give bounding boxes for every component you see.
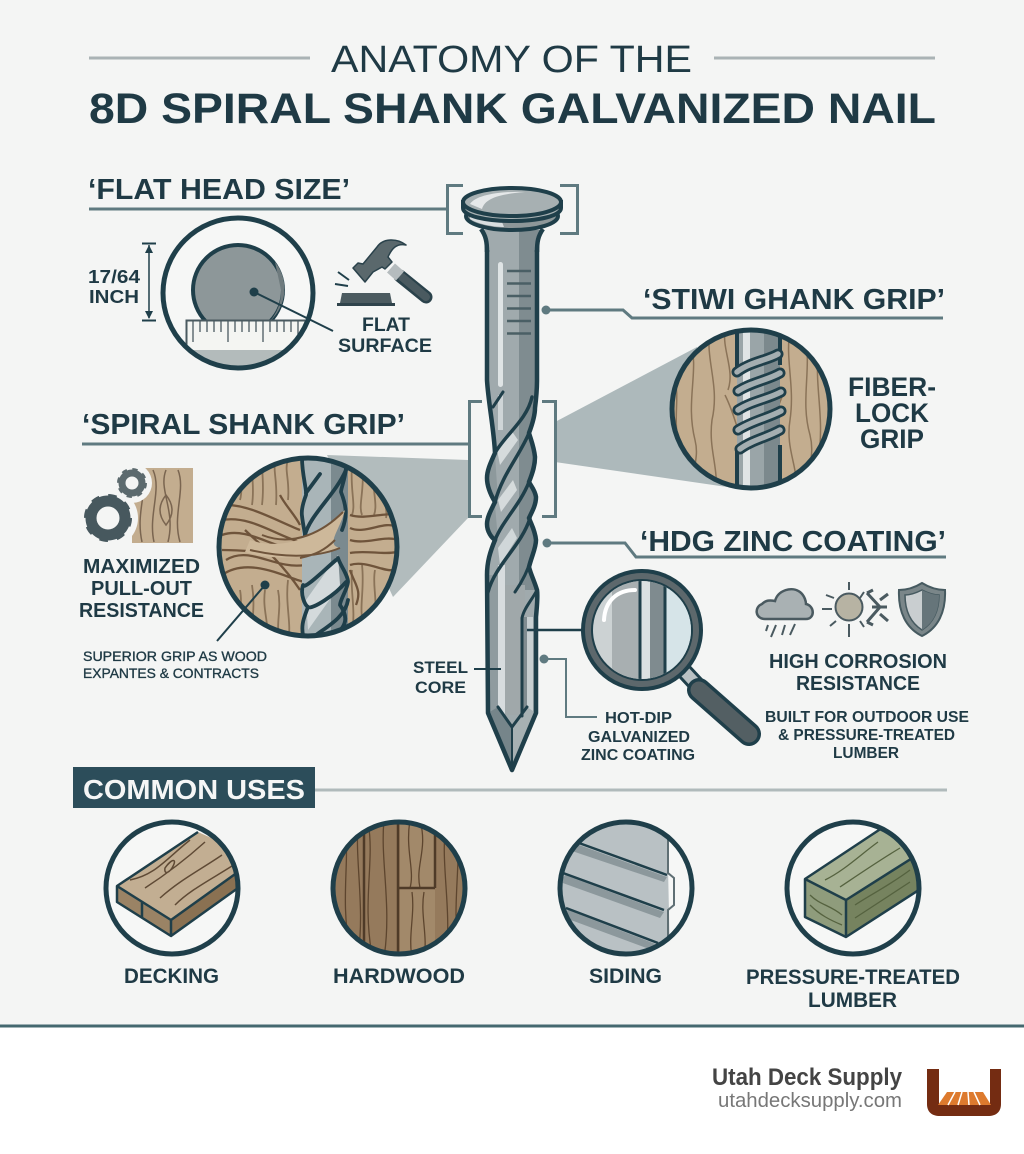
label: hardwood: HARDWOOD: [333, 965, 465, 988]
label: maximized pull-out resistance: RESISTANCE: [79, 600, 204, 622]
label: hot-dip galvanized: GALVANIZED: [588, 729, 690, 746]
heading: hdg zinc coating: ‘HDG ZINC COATING’: [640, 526, 946, 558]
label: fiber-lock grip: [848, 372, 936, 454]
title: ANATOMY OF THE: [331, 39, 692, 81]
spiral bracket: [470, 402, 556, 516]
label: maximized pull-out resistance: PULL-OUT: [91, 578, 192, 600]
panel: spiral shank grip: [78, 409, 469, 681]
dimension label: 17/64: [88, 267, 140, 287]
dimension label: [88, 267, 140, 307]
label: maximized pull-out resistance: [79, 556, 204, 622]
cone: left magnifier projection: [327, 455, 468, 597]
label: steel core: [413, 658, 501, 697]
leader line to shank: [542, 306, 943, 318]
note: outdoor use: BUILT FOR OUTDOOR USE: [765, 709, 969, 726]
icon: rain cloud: [757, 589, 813, 637]
heading: common uses: [73, 767, 947, 808]
spiral highlights: [497, 430, 518, 465]
cone: right magnifier projection: [555, 347, 727, 487]
label: high corrosion resistance: RESISTANCE: [796, 673, 920, 695]
nail head: [463, 188, 561, 252]
nail head bracket: [448, 186, 578, 234]
icon: shield: [899, 583, 945, 636]
label: fiber-lock grip: GRIP: [860, 424, 924, 454]
brand name: Utah Deck Supply: [712, 1064, 903, 1091]
title: 8D SPIRAL SHANK GALVANIZED NAIL: [89, 85, 936, 133]
label: fiber-lock grip: LOCK: [855, 398, 929, 428]
leader line to nail head: [89, 208, 446, 210]
leader line to coating: [542, 538, 946, 557]
footer band: [0, 1024, 1024, 1154]
connector to magnifier: [527, 629, 582, 631]
label: hot-dip galvanized: [581, 710, 695, 764]
shank ticks: [507, 271, 531, 334]
panel: twist shank grip: [542, 284, 945, 495]
label: pressure-treated lumber: [746, 966, 960, 1012]
title: [89, 39, 936, 133]
label: flat surface: FLAT: [362, 315, 410, 336]
note: outdoor use: LUMBER: [833, 745, 899, 762]
detail circle: nail head over ruler: [160, 216, 316, 370]
label: decking: DECKING: [124, 965, 219, 988]
lower shank faces: [489, 575, 498, 712]
heading: shank grip: ‘STIWI GHANK GRIP’: [643, 284, 945, 316]
icon: gears and wood: [78, 463, 193, 548]
icon: sun and snowflake: [822, 582, 888, 637]
footer brand: [712, 1064, 1001, 1116]
detail circle: nail in wood: [672, 325, 830, 495]
use: hardwood: [333, 820, 465, 988]
label: high corrosion resistance: [769, 651, 947, 695]
use: decking: [106, 822, 238, 988]
heading: flat head size: ‘FLAT HEAD SIZE’: [88, 174, 350, 206]
panel: common uses: [73, 767, 960, 1012]
coating pointer: [540, 654, 597, 717]
note: outdoor use: & PRESSURE-TREATED: [778, 727, 955, 744]
dimension arrow: [142, 244, 156, 320]
note: superior grip: [83, 648, 267, 681]
nail shank: [489, 250, 536, 762]
brand url: utahdecksupply.com: [718, 1090, 902, 1112]
label: fiber-lock grip: FIBER-: [848, 372, 936, 402]
note: superior grip: EXPANTES & CONTRACTS: [83, 665, 259, 681]
note: superior grip: SUPERIOR GRIP AS WOOD: [83, 648, 267, 664]
icon: magnifying glass: [581, 569, 749, 734]
icon: logo: [927, 1069, 1001, 1116]
panel: flat head size: [88, 174, 446, 380]
detail circle: spiral in wood fibers: [219, 456, 398, 640]
label: flat surface: [338, 315, 432, 357]
twisted thread: [737, 354, 781, 449]
wood fibers pointer: [217, 580, 270, 641]
heading: spiral shank grip: ‘SPIRAL SHANK GRIP’: [82, 409, 405, 441]
label: steel core: CORE: [415, 678, 466, 697]
nail illustration: [463, 188, 561, 770]
heading: common uses: COMMON USES: [83, 774, 305, 805]
icon: hammer on flat surface: [335, 240, 426, 306]
use: pressure-treated lumber: [746, 822, 960, 1012]
note: outdoor use: [765, 709, 969, 762]
label: hot-dip galvanized: HOT-DIP: [605, 710, 672, 727]
wood fibers crossing nail: [245, 510, 345, 558]
label: pressure-treated lumber: PRESSURE-TREATED: [746, 966, 960, 989]
label: high corrosion resistance: HIGH CORROSION: [769, 651, 947, 673]
nail outline and spirals: [487, 247, 537, 770]
dimension label: INCH: [89, 287, 139, 307]
label: hot-dip galvanized: ZINC COATING: [581, 747, 695, 764]
panel: hdg zinc coating: [527, 526, 969, 764]
leader line to spiral: [82, 442, 469, 446]
label: maximized pull-out resistance: MAXIMIZED: [83, 556, 200, 578]
flat surface pointer: [250, 288, 333, 331]
label: pressure-treated lumber: LUMBER: [808, 989, 897, 1012]
label: steel core: STEEL: [413, 658, 468, 677]
label: flat surface: SURFACE: [338, 336, 432, 357]
label: siding: SIDING: [589, 965, 662, 988]
use: siding: [560, 820, 692, 988]
